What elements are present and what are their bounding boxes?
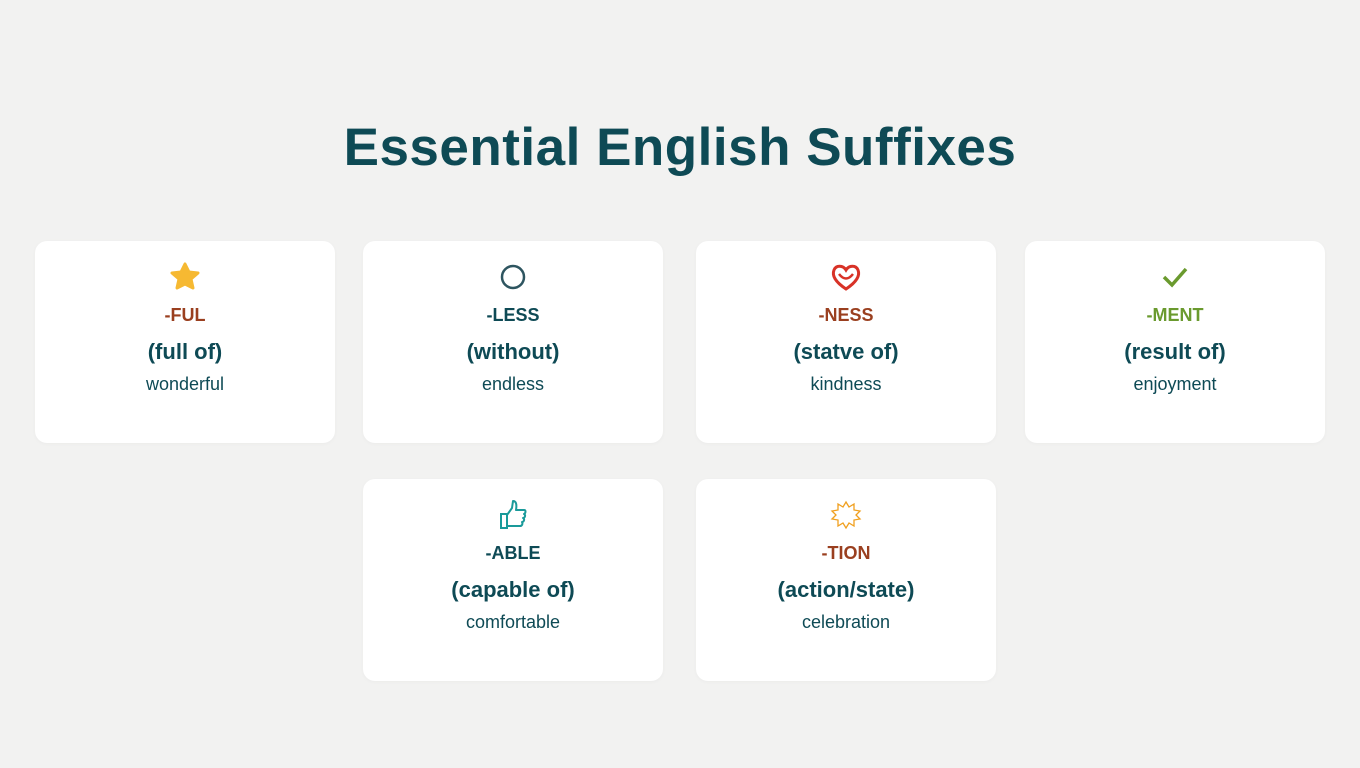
card: -MENT bbox=[1025, 241, 1325, 443]
suffix: -NESS bbox=[818, 305, 874, 325]
card: -NESS bbox=[696, 241, 996, 443]
title: Essential English Suffixes bbox=[344, 118, 1016, 177]
example: wonderful bbox=[146, 374, 224, 394]
suffix: -MENT bbox=[1146, 305, 1204, 325]
meaning: (capable of) bbox=[451, 577, 575, 602]
example: celebration bbox=[802, 612, 890, 632]
card: -LESS bbox=[363, 241, 663, 443]
card: -FUL bbox=[35, 241, 335, 443]
example: endless bbox=[482, 374, 544, 394]
card: -TION bbox=[696, 479, 996, 681]
meaning: (statve of) bbox=[793, 339, 899, 364]
suffix: -LESS bbox=[486, 305, 540, 325]
icon: star bbox=[170, 262, 200, 290]
icon: check bbox=[1162, 268, 1188, 288]
meaning: (full of) bbox=[148, 339, 222, 364]
icon: burst bbox=[830, 500, 862, 530]
icon: heart bbox=[832, 264, 860, 291]
card: -ABLE bbox=[363, 479, 663, 681]
icon: thumbs up bbox=[500, 500, 526, 529]
meaning: (action/state) bbox=[778, 577, 914, 602]
suffix: -FUL bbox=[164, 305, 205, 325]
icon: circle bbox=[500, 264, 526, 290]
example: kindness bbox=[810, 374, 882, 394]
suffix: -TION bbox=[822, 543, 870, 563]
example: comfortable bbox=[466, 612, 560, 632]
example: enjoyment bbox=[1133, 374, 1217, 394]
meaning: (result of) bbox=[1124, 339, 1226, 364]
suffix: -ABLE bbox=[486, 543, 540, 563]
meaning: (without) bbox=[467, 339, 559, 364]
